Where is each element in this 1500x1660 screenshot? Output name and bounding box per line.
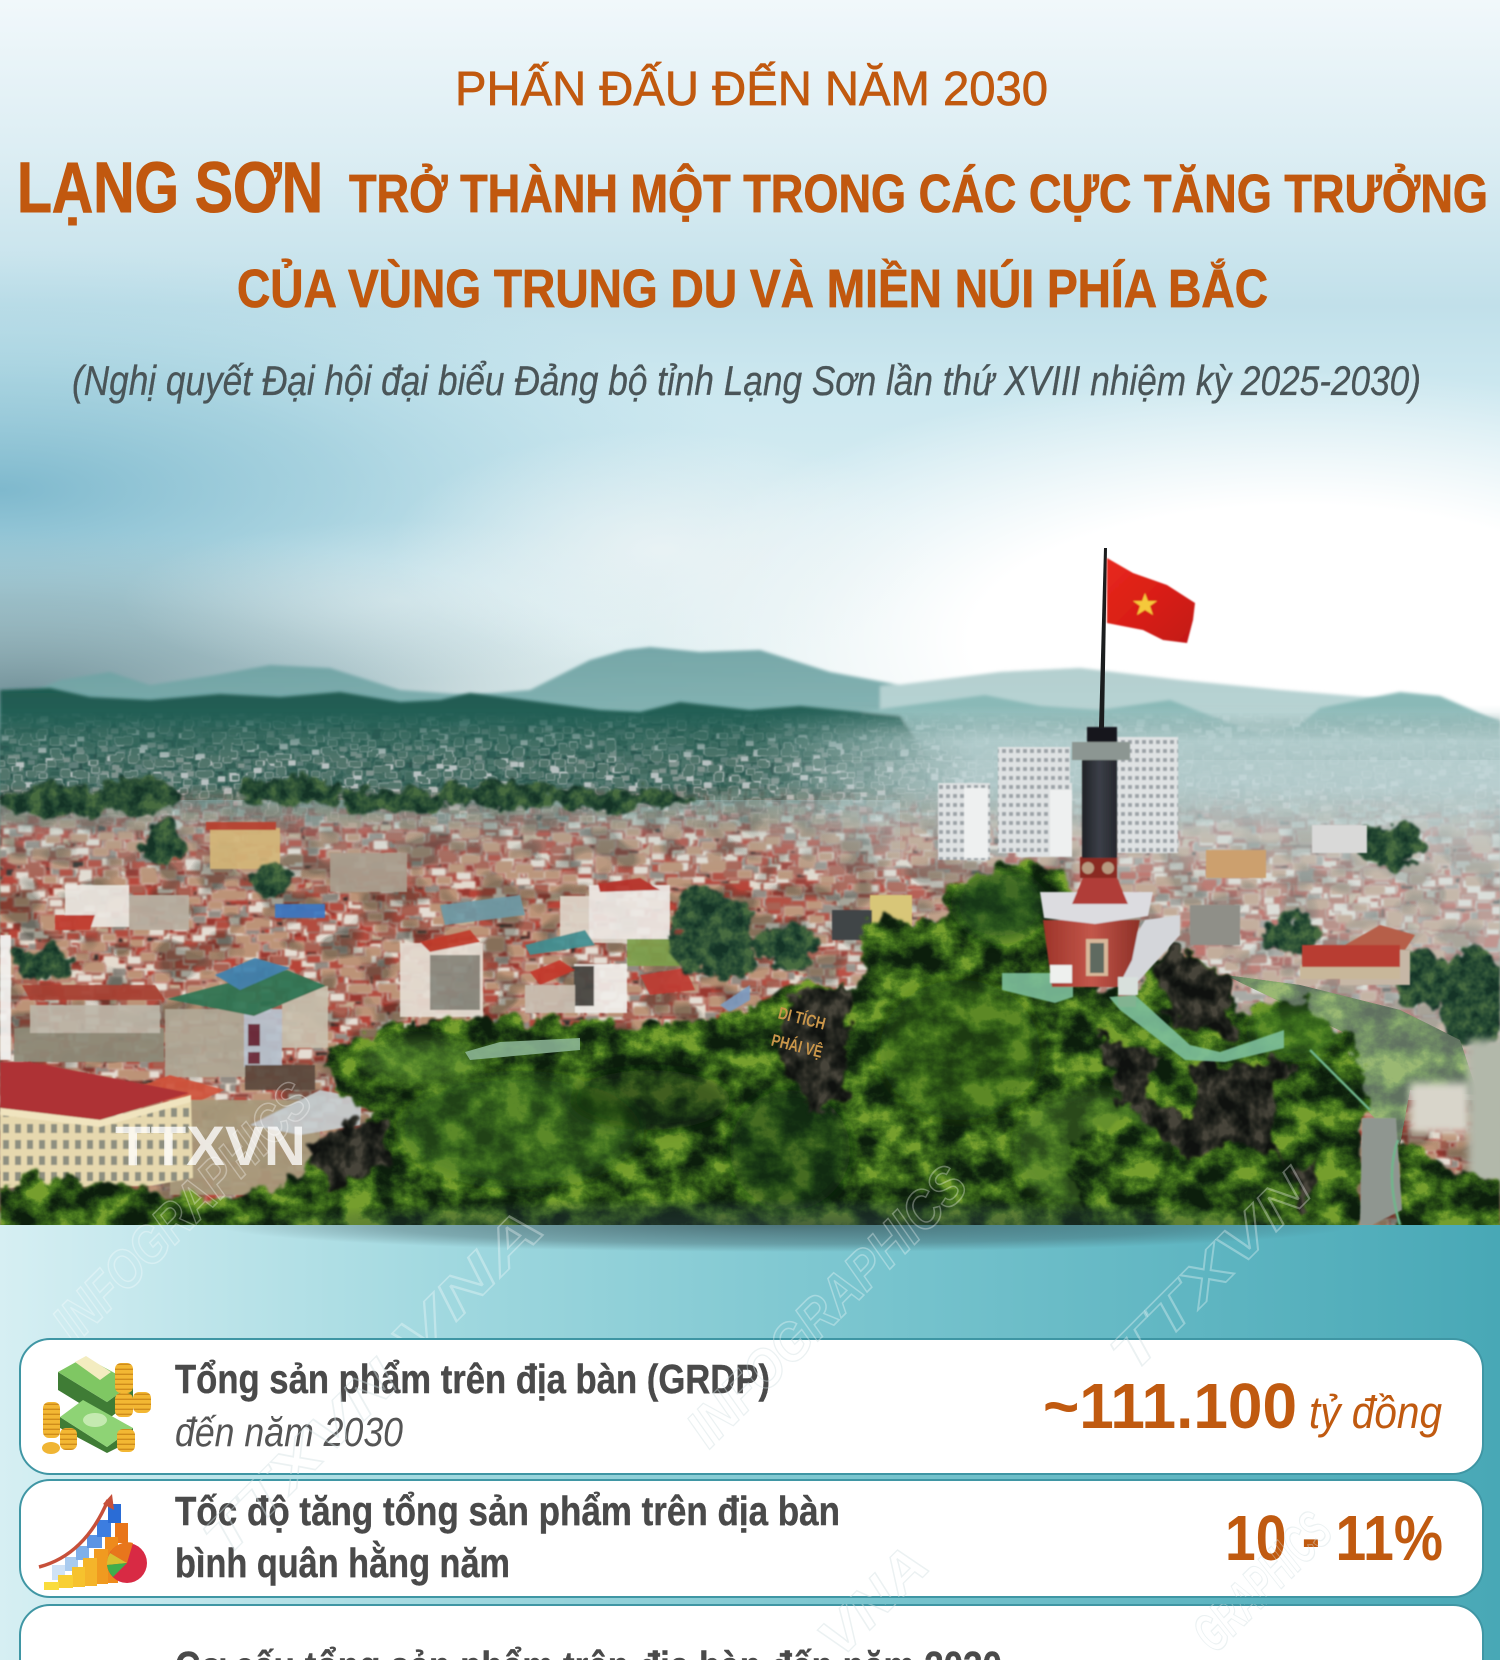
card watermarks	[191, 1154, 1344, 1660]
city: right-side buildings and hotels	[832, 737, 1415, 985]
flag pole	[1099, 548, 1107, 728]
tower: red drum	[1043, 920, 1140, 987]
card watermarks: TTXVN	[1098, 1157, 1325, 1384]
photo: sky and Lạng Sơn city with flag tower	[0, 0, 1500, 1230]
small green walkway left	[465, 1038, 580, 1060]
card watermarks: TTXVN	[191, 1348, 411, 1568]
background watermarks: TTXVN	[1098, 1157, 1325, 1384]
background watermarks	[41, 1071, 1325, 1458]
city: far rows	[0, 712, 1500, 837]
flag star	[1133, 593, 1157, 615]
far mountains	[50, 645, 1500, 734]
main title line 1: LẠNG SƠN	[17, 149, 323, 228]
main title line 2: CỦA VÙNG TRUNG DU VÀ MIỀN NÚI PHÍA BẮC	[237, 258, 1268, 319]
foliage over rocks	[1050, 1040, 1340, 1225]
card 2 label	[175, 1488, 840, 1586]
card 1 label	[175, 1356, 770, 1455]
card watermarks: GRAPHICS	[1181, 1501, 1344, 1660]
card 1 label: đến năm 2030	[175, 1409, 403, 1455]
TTXVN photo watermark: TTXVN	[115, 1114, 306, 1177]
icon: bar chart with pie and arrow	[39, 1494, 147, 1590]
card 1 label: Tổng sản phẩm trên địa bàn (GRDP)	[175, 1356, 770, 1402]
sign on rock: DI TÍCH	[776, 1004, 827, 1034]
background watermarks: VNA	[379, 1197, 556, 1373]
tower: red cone	[1072, 878, 1128, 904]
shadow under photo	[215, 1198, 1355, 1252]
flag tower	[1002, 727, 1284, 1062]
sign on rock: PHÁI VỆ	[769, 1031, 825, 1062]
stairs on right slope	[1310, 1050, 1402, 1225]
card 3 panel: GRDP structure	[20, 1605, 1483, 1660]
tower: railing left	[1002, 973, 1073, 1003]
card 2 panel: growth rate	[20, 1480, 1483, 1597]
city: dark trees between houses	[0, 760, 1500, 1060]
card 2 label: bình quân hằng năm	[175, 1540, 510, 1586]
sign on rock	[769, 1004, 831, 1062]
near ridges	[0, 688, 1500, 800]
card watermarks: INFOGRAPHICS	[675, 1154, 979, 1458]
red roof bottom-left yellow building	[0, 1062, 193, 1188]
city: left-side buildings	[0, 822, 750, 1195]
card 1 panel: GRDP	[20, 1339, 1483, 1474]
tower: entrance signs	[1050, 965, 1072, 983]
city: main mosaic field	[0, 705, 1500, 1230]
tower: red base box	[1080, 857, 1117, 878]
title block	[17, 62, 1488, 404]
dark limestone rocks	[300, 940, 1340, 1225]
tower: white stairway	[1117, 915, 1180, 985]
tower: zigzag walkway	[1109, 995, 1284, 1062]
card 1 value	[1043, 1370, 1442, 1442]
tower: white balustrade	[1040, 892, 1153, 924]
tower: platform	[1072, 742, 1130, 760]
card 2 label: Tốc độ tăng tổng sản phẩm trên địa bàn	[175, 1488, 840, 1534]
kicker: PHẤN ĐẤU ĐẾN NĂM 2030	[455, 62, 1048, 116]
foreground green hill	[0, 850, 1500, 1230]
card 2 value: 10 - 11%	[1225, 1502, 1443, 1574]
icon: money and coins	[42, 1356, 151, 1454]
teal lower background	[0, 1198, 1500, 1660]
tower: column	[1082, 760, 1117, 858]
flag	[1107, 558, 1195, 643]
card 1 value: tỷ đồng	[1309, 1387, 1442, 1438]
pale hillside foliage right	[1226, 975, 1472, 1145]
background watermarks: INFOGRAPHICS	[675, 1154, 979, 1458]
card 1 value: ~111.100	[1043, 1370, 1297, 1442]
background watermarks: INFOGRAPHICS	[41, 1071, 324, 1353]
